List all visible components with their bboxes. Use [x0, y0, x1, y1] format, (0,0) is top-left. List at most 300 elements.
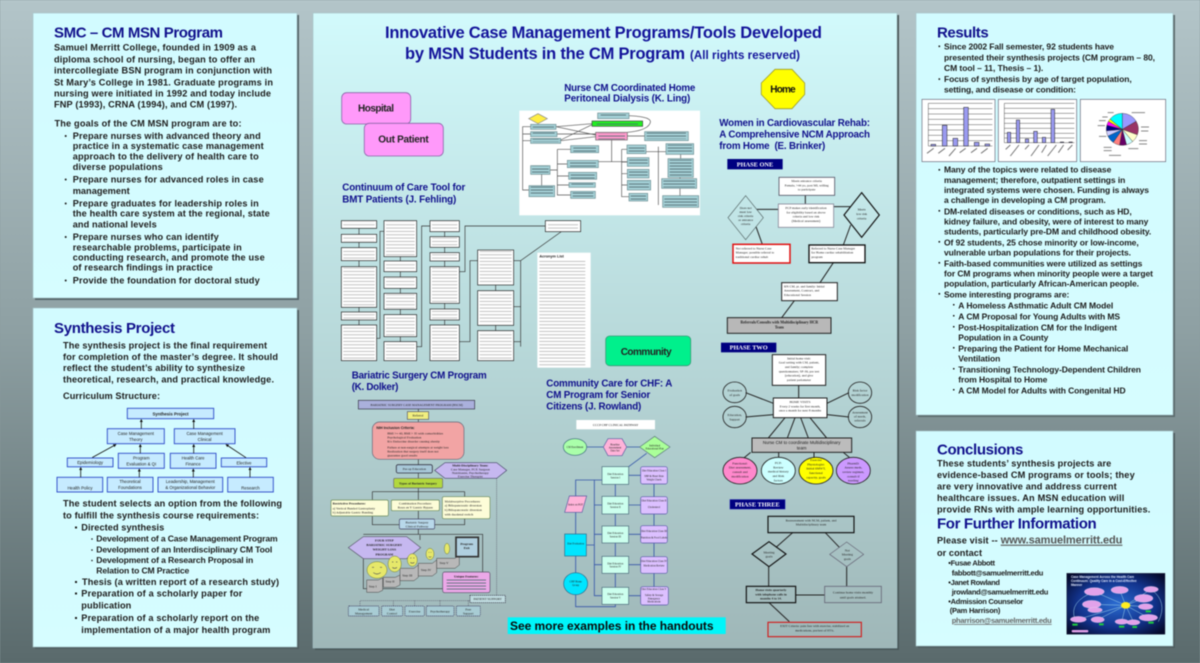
- flowchart: bariatric surgery program: NIH Inclusion Criteria:: [376, 426, 415, 430]
- chart: curriculum structure hierarchy: Elective: [236, 460, 252, 466]
- flowchart: bariatric surgery program: BMI >= 40, BMI > 35 with comorbidities: [387, 431, 444, 436]
- chart: curriculum structure hierarchy: Evaluation & QI: [126, 462, 156, 466]
- flowchart: bariatric surgery program: Multi-Disciplinary Team:: [452, 464, 488, 468]
- flowchart: phase three: EXIT Criteria: pain free with exercise, stabilized on: [780, 624, 850, 629]
- chart: curriculum structure hierarchy: Finance: [185, 462, 201, 466]
- flowchart: phase two: consult and: [732, 470, 748, 474]
- flowchart: CHF clinical pathway: Safety & Storage: [645, 594, 664, 597]
- chart: curriculum structure hierarchy: Program: [133, 456, 150, 461]
- flowchart: phase two: Assessment: [852, 410, 868, 414]
- flowchart: phase three: months 4 to 14.: [760, 597, 782, 601]
- text block: program goals: of research findings in practice: [73, 263, 213, 273]
- flowchart: bariatric surgery program: Step I: [369, 584, 377, 588]
- text block: synthesis options: [63, 499, 282, 635]
- text block: results discussion: Faith-based communities were utilized as settings: [944, 258, 1143, 268]
- flowchart: CHF clinical pathway: Diet Education: [607, 532, 624, 535]
- chart: curriculum structure hierarchy: Leadership, Management: [166, 479, 215, 484]
- text block: results discussion: A CM Model for Adults with Congenital HD: [958, 386, 1126, 396]
- text block: results discussion: A CM Proposal for Young Adults with MS: [958, 311, 1120, 321]
- text block: contact information: •Admission Counselor: [948, 597, 1023, 606]
- flowchart: bariatric surgery program: Exercise: [409, 609, 421, 613]
- chart: curriculum structure hierarchy: [57, 408, 273, 492]
- text block: results discussion: Post-Hospitalization CM for the Indigent: [958, 322, 1117, 332]
- text block: synthesis description: theoretical, research, and practical knowledge.: [63, 375, 274, 385]
- text block: program goals: researchable problems, participate in: [73, 242, 242, 252]
- flowchart: bariatric surgery program: Psychological Evaluation: [387, 435, 422, 439]
- flowchart: phase two: of needs,: [854, 414, 866, 419]
- text block: program goals: conducting research, and promote the use: [73, 253, 265, 263]
- flowchart: bariatric surgery program: BARIATRIC SURGERY: [366, 543, 403, 547]
- flowchart: bariatric surgery program: PATIENT SUPPORT: [473, 597, 502, 601]
- flowchart: phase two: PharmD:: [847, 461, 859, 465]
- text block: contact information: jrowland@samuelmerritt.edu: [951, 588, 1049, 597]
- text block: results summary: presented their synthesis projects (CM program – 80,: [944, 52, 1155, 62]
- flowchart: phase one: [727, 159, 879, 333]
- flowchart: bariatric surgery program: Step III: [402, 574, 412, 578]
- flowchart: bariatric surgery program: Program: [460, 542, 473, 546]
- flowchart: bariatric surgery program: Case Manager, PCP, Surgeon: [451, 467, 490, 472]
- flowchart: CHF clinical pathway: Medications: [647, 601, 661, 604]
- flowchart: bariatric surgery program: BARIATRIC SURGERY CASE MANAGEMENT PROGRAM (BSCM): [370, 403, 463, 407]
- text block: results discussion: students, particularly pre-DM and childhood obesity.: [944, 226, 1151, 236]
- panel: Synthesis Project: [33, 308, 299, 649]
- flowchart: phase two: of goals: [729, 393, 741, 397]
- setting tag: Home: Home: [770, 84, 796, 95]
- heading: For Further Information: For Further Information: [937, 515, 1097, 532]
- text block: synthesis options: to fulfill the synthesis course requirements:: [63, 511, 259, 521]
- flowchart: CHF clinical pathway: Baseline: [610, 444, 620, 447]
- flowchart: bariatric surgery program: Referral: [413, 414, 424, 418]
- flowchart: bariatric surgery program: Failure at non-surgical attempts at weight loss: [387, 446, 449, 450]
- flowchart: CHF clinical pathway: [563, 420, 670, 607]
- flowchart: phase three: medications, pre/test of 95%.: [795, 628, 834, 633]
- flowchart: phase one: Assessment, Contract, and: [784, 289, 820, 294]
- text block: results discussion: [938, 165, 1153, 396]
- flowchart: bariatric surgery program: Control: [387, 611, 397, 615]
- text block: college history: Samuel Merritt College, founded in 1909 as a: [54, 43, 257, 53]
- heading: Bariatric Surgery CM Program: (K. Dolker): [352, 382, 398, 393]
- flowchart: phase two: factors: [774, 478, 784, 482]
- text block: program goals: practice in a systematic case management: [73, 141, 264, 151]
- flowchart: CHF clinical pathway: Session III: [610, 535, 621, 538]
- setting tag: Community: [606, 336, 691, 366]
- chart: curriculum structure hierarchy: Case Management: [118, 431, 155, 436]
- title: (All rights reserved): [690, 50, 800, 62]
- heading: Results: Results: [937, 24, 989, 41]
- flowchart: phase two: modification: [851, 393, 869, 397]
- flowchart: phase one: Educational Session: [784, 293, 811, 297]
- flowchart: bariatric surgery program: Support: [463, 611, 474, 615]
- flowchart: bariatric surgery program: Pre-op Education: [403, 467, 426, 471]
- heading: Bariatric Surgery CM Program: Bariatric Surgery CM Program: [352, 370, 487, 381]
- flowchart: bariatric surgery program: Management: [355, 611, 372, 615]
- text block: synthesis options: Relation to CM Practice: [96, 565, 190, 575]
- text block: results summary: Focus of synthesis by age of target population,: [944, 74, 1132, 84]
- text block: college history: FNP (1993), CRNA (1994), and CM (1997).: [54, 100, 237, 110]
- flowchart: bariatric surgery program: FOUR STEP: [375, 538, 394, 542]
- chart: curriculum structure hierarchy: Theory: [129, 437, 143, 442]
- flowchart: phase three: until goals attained.: [840, 595, 866, 599]
- flowchart: phase two: questionnaires; SF-36, pre test: [779, 369, 819, 374]
- flowchart: bariatric surgery program: a) Biliopancreatic diversion: [445, 504, 482, 508]
- text block: synthesis options: Development of a Case Management Program: [96, 534, 278, 544]
- text block: results discussion: Population in a County: [958, 333, 1049, 343]
- heading: Nurse CM home peritoneal dialysis: Peritoneal Dialysis (K. Ling): [564, 94, 690, 105]
- flowchart: bariatric surgery program: Step IV: [421, 568, 432, 572]
- text block: results discussion: Many of the topics were related to disease: [944, 165, 1112, 175]
- flowchart: phase one: (Medical assessment): [792, 219, 820, 223]
- text block: contact information: Please visit --: [937, 536, 998, 546]
- flowchart: phase three: with telephone calls in: [755, 592, 787, 596]
- text block: synthesis description: for completion of the master’s degree. It should: [63, 352, 278, 362]
- text block: synthesis options: Development of an Interdisciplinary CM Tool: [96, 544, 272, 554]
- image: case management continuum diagram: [1067, 573, 1165, 634]
- flowchart: CHF clinical pathway: Session I: [610, 476, 620, 479]
- setting tag: Out Patient: Out Patient: [378, 135, 429, 146]
- text block: college history: intercollegiate BSN program in conjunction with: [54, 66, 272, 76]
- text block: program goals: Prepare nurses who can identify: [73, 232, 220, 242]
- flowchart: bariatric surgery program: Psychotherapy: [430, 609, 450, 613]
- chart: curriculum structure hierarchy: Theoretical: [119, 479, 141, 484]
- text block: results discussion: Preparing the Patient for Home Mechanical: [958, 344, 1128, 354]
- flowchart: bariatric surgery program: Step V: [439, 561, 449, 565]
- flowchart: CHF clinical pathway: Medication Review: [644, 565, 665, 568]
- flowchart: phase three: Not: [845, 548, 850, 552]
- heading: Community Care for CHF: Community Care for CHF: A: [546, 379, 672, 390]
- text block: contact information: pharrison@samuelmerritt.edu: [952, 616, 1052, 625]
- flowchart: phase one: Female, >44 yo, post MI, willing: [785, 183, 829, 188]
- text block: results discussion: from Hospital to Home: [958, 375, 1048, 385]
- text block: results discussion: a challenge in developing a CM program.: [944, 195, 1106, 205]
- flowchart: bariatric surgery program: Bariatric Surgery: [406, 520, 429, 524]
- flowchart: CHF clinical pathway: CHF Home: [570, 581, 583, 584]
- flowchart: bariatric surgery program: Types of Bariatric Surgery: [399, 481, 437, 485]
- flowchart: phase three: Meeting: [763, 550, 775, 554]
- flowchart: bariatric surgery program: Peer: [465, 607, 472, 611]
- text block: program goals: approach to the delivery of health care to: [73, 152, 259, 162]
- text block: synthesis options: The student selects an option from the following: [63, 499, 282, 509]
- flowchart: phase one: criteria: [741, 222, 751, 226]
- flowchart: CHF clinical pathway: CM Enrollment: [567, 446, 584, 449]
- heading: Synthesis Project: Synthesis Project: [54, 320, 175, 337]
- flowchart: bariatric surgery program: WEIGHT LOSS: [373, 548, 396, 552]
- setting tag: Out Patient: [364, 123, 443, 156]
- text block: contact information: •Janet Rowland: [948, 578, 1000, 587]
- text block: program goals: Prepare nurses with advanced theory and: [73, 131, 261, 141]
- flowchart: bariatric surgery program: a) Vertical Banded Gastroplasty: [333, 506, 375, 510]
- flowchart: bariatric surgery program: guarantee good results: [387, 454, 418, 458]
- text block: results discussion: Transitioning Technology-Dependent Children: [958, 365, 1141, 375]
- flowchart: phase three: Meeting: [842, 553, 853, 557]
- text block: program goals: Prepare graduates for leadership roles in: [73, 199, 259, 209]
- setting tag: Hospital: [342, 93, 411, 124]
- text block: results discussion: Of 92 students, 25 chose minority or low-income,: [944, 237, 1139, 247]
- flowchart: phase two: Initial home visit:: [787, 356, 811, 360]
- text block: results discussion: vulnerable urban populations for their projects.: [944, 247, 1131, 257]
- flowchart: CHF clinical pathway: Session IV: [610, 566, 621, 569]
- flowchart: bariatric surgery program: Malabsorptive Procedures:: [445, 499, 481, 503]
- flowchart: bariatric surgery program: Step II: [386, 580, 394, 584]
- flowchart: phase two: Education,: [728, 413, 742, 418]
- panel: SMC CM MSN program: [33, 13, 299, 300]
- flowchart: phase two: medical history: [768, 470, 789, 474]
- text block: results discussion: integrated systems were chosen. Funding is always: [944, 185, 1149, 195]
- flowchart: peritoneal dialysis: [519, 111, 700, 215]
- text block: program goals: the health care system at the regional, state: [73, 209, 270, 219]
- flowchart: bariatric surgery program: Clinical Pathway: [406, 524, 429, 528]
- flowchart: phase two: Evaluation: [727, 389, 742, 393]
- flowchart: CHF clinical pathway: Session V: [610, 596, 621, 599]
- flowchart: phase one: program: [811, 255, 823, 259]
- flowchart: CHF clinical pathway: SBP & Heart Rate: [644, 475, 665, 478]
- flowchart: phase two: Risk factor: [853, 389, 868, 393]
- flowchart: phase two: and family; complete: [785, 365, 814, 369]
- flowchart: CHF clinical pathway: Group: [572, 584, 580, 587]
- flowchart: phase two: (education), and give: [785, 374, 814, 379]
- acronym list: [537, 253, 591, 368]
- chart: curriculum structure hierarchy: Health Policy: [67, 486, 93, 490]
- flowchart: phase one: Manager; possible referral to: [736, 251, 775, 255]
- flowchart: bariatric surgery program: Realization that surgery itself does not: [387, 450, 439, 454]
- flowchart: phase two: [721, 343, 872, 484]
- text block: results discussion: A Homeless Asthmatic Adult CM Model: [958, 300, 1113, 310]
- chart: curriculum structure hierarchy: Research: [241, 486, 260, 490]
- flowchart: continuum of care tool: [341, 221, 591, 368]
- flowchart: bariatric surgery program: Unique Features:: [454, 575, 479, 579]
- flowchart: phase two: needing: [848, 479, 859, 483]
- flowchart: bariatric surgery program: Medical: [358, 607, 369, 611]
- chart: curriculum structure hierarchy: & Organizational Behavior: [165, 485, 216, 490]
- flowchart: phase one: RN CM, pt. and family: Initial: [784, 284, 825, 289]
- text block: program goals: management: [73, 186, 130, 196]
- text block: synthesis options: Development of a Research Proposal in: [96, 555, 253, 565]
- setting tag: Home: [761, 69, 805, 109]
- flowchart: phase two: Review: [773, 465, 784, 469]
- flowchart: bariatric surgery program: Diet: [389, 607, 395, 611]
- flowchart: phase three: Continue home visits monthly: [833, 591, 873, 595]
- flowchart: CHF clinical pathway: Diet Education Class II: [642, 499, 667, 502]
- text block: synthesis options: publication: [81, 601, 132, 611]
- text block: conclusions: provide RNs with ample learning opportunities.: [937, 504, 1150, 514]
- flowchart: bariatric surgery program: [331, 400, 507, 616]
- text block: program goals: diverse populations: [73, 162, 163, 172]
- title: Innovative Case Management Programs/Tools Developed: [385, 24, 822, 42]
- flowchart: phase two: Initial 6MWT,: [806, 467, 826, 472]
- acronym list: Acronym List: [539, 255, 565, 259]
- flowchart: phase one: traditional cardiac rehab: [736, 255, 768, 259]
- flowchart: CHF clinical pathway: Diet Education Class IV: [641, 560, 667, 563]
- flowchart: CHF clinical pathway: Session II: [610, 506, 621, 509]
- flowchart: bariatric surgery program: b) Adjustable Gastric Banding: [333, 511, 373, 515]
- text block: results summary: CM tool – 11, Thesis – 1).: [944, 63, 1043, 73]
- chart: curriculum structure hierarchy: Clinical: [198, 437, 212, 442]
- flowchart: CHF clinical pathway: Diet Education Class V: [642, 588, 667, 591]
- flowchart: bariatric surgery program: Combination Procedure:: [399, 502, 432, 506]
- text block: synthesis description: reflect the student’s ability to synthesize: [63, 363, 245, 373]
- text block: synthesis options: implementation of a major health program: [81, 625, 270, 635]
- chart: curriculum structure hierarchy: Foundations: [118, 485, 142, 490]
- flowchart: phase one: PCP makes early identification: [785, 206, 827, 210]
- chart: curriculum structure hierarchy: Epidemiology: [77, 460, 104, 465]
- flowchart: CHF clinical pathway: Diet Education Class III: [641, 530, 667, 533]
- heading: Women in Cardiovascular Rehab: [719, 118, 870, 152]
- title: [385, 24, 822, 63]
- flowchart: phase two: team: [797, 446, 807, 451]
- heading: Continuum of Care Tool: Continuum of Care Tool for: [342, 183, 465, 194]
- text block: conclusions: healthcare issues. An MSN education will: [937, 493, 1124, 503]
- text block: college history: [54, 43, 273, 110]
- flowchart: CHF clinical pathway: Assessment: [609, 447, 622, 450]
- flowchart: phase two: patient pedometer: [787, 378, 812, 382]
- heading: SMC CM MSN Program: SMC – CM MSN Program: [54, 24, 223, 41]
- heading: Women in Cardiovascular Rehab: from Home (E. Brinker): [719, 141, 825, 152]
- text block: results discussion: kidney failure, and obesity, were of interest to many: [944, 216, 1149, 226]
- flowchart: phase one: low risk: [856, 212, 867, 216]
- flowchart: CHF clinical pathway: Diet Education: [607, 473, 624, 476]
- flowchart: phase two: Assess meds,: [844, 466, 862, 471]
- flowchart: phase one: meet low: [740, 210, 752, 214]
- flowchart: CHF clinical pathway: Nutrition & Food Labels: [641, 536, 667, 539]
- chart: curriculum structure hierarchy: Case Management: [186, 431, 224, 436]
- flowchart: CHF clinical pathway: Diet Evaluation: [567, 543, 585, 546]
- flowchart: phase one: Referrals/Consults with Multidisciplinary HCR: [740, 321, 818, 325]
- flowchart: phase two: Physiologist:: [807, 462, 825, 466]
- flowchart: phase one: for Home cardiac rehabilitation: [811, 251, 854, 255]
- flowchart: phase one: Team: [775, 326, 785, 330]
- flowchart: phase one: for eligibility based on above: [786, 210, 826, 214]
- flowchart: phase one: Does not: [740, 206, 752, 210]
- flowchart: phase two: Functional:: [732, 461, 748, 465]
- title: by MSN Students in the CM Program: [405, 45, 685, 63]
- heading: Community Care for CHF: [546, 379, 672, 412]
- flowchart: CHF clinical pathway: Individual: [649, 444, 660, 447]
- text block: college history: St Mary’s College in 1981. Graduate programs in: [54, 77, 273, 87]
- flowchart: phase one: Referred to Nurse Case Manager: [811, 246, 856, 250]
- flowchart: phase three: goals: [844, 557, 852, 561]
- flowchart: CHF clinical pathway: Diet Education Class I: [642, 470, 666, 473]
- flowchart: CHF clinical pathway: Cholesterol: [648, 506, 660, 509]
- flowchart: phase one: or entrance: [738, 218, 754, 222]
- chart: focus by setting: [998, 99, 1077, 162]
- chart: focus by age of target population: [922, 99, 995, 162]
- chart: curriculum structure hierarchy: Synthesis Project: [152, 411, 189, 416]
- text block: synthesis options: Directed synthesis: [81, 523, 164, 533]
- panel: Results: [916, 13, 1175, 417]
- flowchart: CHF clinical pathway: CCCP CHF CLINICAL PATHWAY: [593, 423, 639, 427]
- text block: synthesis description: [63, 341, 278, 385]
- flowchart: bariatric surgery program: Exercise Therapist: [458, 474, 483, 478]
- text block: results discussion: DM-related diseases or conditions, such as HD,: [944, 206, 1132, 216]
- flowchart: phase two: Diet assessment,: [729, 466, 751, 471]
- text block: conclusions: evidence-based CM programs or tools; they: [937, 470, 1136, 480]
- text block: contact information: fabbott@samuelmerritt.edu: [952, 568, 1044, 577]
- flowchart: phase two: review regimen,: [843, 470, 864, 475]
- image: case management continuum diagram: Case Management Across the Health Care: [1071, 575, 1134, 579]
- flowchart: phase two: Goal setting with CM, patient,: [779, 361, 819, 366]
- flowchart: phase two: Nurse CM to coordinate Multidisciplinary: [763, 440, 841, 445]
- flowchart: CHF clinical pathway: Diet Education: [607, 593, 624, 596]
- heading: Community Care for CHF: CM Program for Senior: [546, 390, 650, 401]
- flowchart: phase one: criteria: [857, 216, 867, 220]
- flowchart: phase two: functional: [809, 471, 823, 475]
- flowchart: bariatric surgery program: R/o Endocrine disorder causing obesity: [387, 439, 440, 443]
- panel: Conclusions and further information: [916, 431, 1175, 648]
- heading: Nurse CM home peritoneal dialysis: [564, 83, 696, 105]
- flowchart: phase three: Home visits quarterly: [756, 588, 787, 592]
- text block: results summary: Since 2002 Fall semester, 92 students have: [944, 41, 1114, 51]
- image: case management continuum diagram: Continuum: Quality Care in a Cost-Effective: [1071, 579, 1137, 583]
- text block: college history: nursing were initiated in 1992 and today include: [54, 89, 271, 99]
- text block: contact information: (Pam Harrison): [950, 606, 1001, 615]
- flowchart: phase one: Not referred to Nurse Case: [736, 246, 772, 250]
- flowchart: bariatric surgery program: Roux en Y Gastric Bypass: [398, 506, 434, 510]
- text block: program goals: Provide the foundation for doctoral study: [73, 275, 261, 285]
- text block: conclusions: [937, 458, 1150, 514]
- heading: Continuum of Care Tool: [342, 183, 465, 205]
- text block: program goals: The goals of the CM MSN program are to:: [54, 118, 242, 128]
- text block: results discussion: management; therefore, outpatient settings in: [944, 175, 1125, 185]
- setting tag: Community: Community: [621, 347, 672, 358]
- flowchart: phase two: once a month for next 8 months: [779, 409, 822, 413]
- flowchart: phase two: modification: [731, 474, 749, 478]
- flowchart: phase two: PHASE TWO: [730, 345, 768, 352]
- flowchart: bariatric surgery program: with duodenal switch: [445, 512, 473, 516]
- flowchart: bariatric surgery program: b) Biliopancreatic diversion: [445, 508, 482, 512]
- text block: program goals: [54, 118, 270, 285]
- text block: conclusions: are very innovative and address current: [937, 481, 1117, 491]
- flowchart: phase three: PHASE THREE: [735, 502, 780, 509]
- setting tag: Hospital: Hospital: [358, 104, 394, 115]
- flowchart: CHF clinical pathway: Educational Plan: [646, 447, 664, 450]
- flowchart: bariatric surgery program: Exit: [464, 546, 471, 550]
- text block: program goals: and national levels: [73, 219, 157, 229]
- heading: Community Care for CHF: Citizens (J. Rowland): [546, 401, 641, 412]
- flowchart: bariatric surgery program: Restrictive Procedures:: [333, 502, 366, 506]
- flowchart: phase one: criteria and low risk: [793, 215, 820, 219]
- text block: synthesis options: Thesis (a written report of a research study): [82, 577, 279, 587]
- heading: Continuum of Care Tool: BMT Patients (J. Fehling): [342, 194, 456, 205]
- flowchart: CHF clinical pathway: Emergency: [648, 597, 661, 600]
- text block: synthesis description: The synthesis project is the final requirement: [63, 341, 267, 351]
- text block: synthesis options: Preparation of a scholarly report on the: [81, 613, 259, 623]
- flowchart: CHF clinical pathway: Diet Education: [607, 503, 624, 506]
- flowchart: phase three: Multidisciplinary team: [796, 523, 827, 527]
- flowchart: phase two: PCP:: [775, 461, 782, 465]
- flowchart: bariatric surgery program: PROGRAM: [376, 552, 394, 556]
- chart: focus by disease or condition: [1080, 99, 1166, 162]
- flowchart: phase three: goals: [765, 555, 773, 559]
- heading: Women in Cardiovascular Rehab: Women in Cardiovascular Rehab:: [719, 118, 870, 129]
- flowchart: bariatric surgery program: Nutritionist, Psychotherapy: [452, 471, 489, 476]
- text block: results discussion: population, particularly African-American people.: [944, 278, 1139, 288]
- text block: results discussion: Ventilation: [958, 354, 1000, 364]
- text block: results discussion: Some interesting programs are:: [944, 289, 1069, 299]
- flowchart: CHF clinical pathway: Weight Check: [646, 478, 662, 481]
- flowchart: phase two: Every 2 weeks for first month,: [780, 404, 820, 409]
- flowchart: CHF clinical pathway: Index on POT: [568, 503, 584, 506]
- text block: contact information: [937, 535, 1122, 625]
- flowchart: phase two: referrals: [854, 418, 866, 422]
- flowchart: CHF clinical pathway: Data Set: [610, 450, 620, 453]
- flowchart: phase three: Reassessment with NCM, patient, and: [786, 518, 837, 523]
- text block: results discussion: for CM programs when minority people were a target: [944, 268, 1153, 278]
- flowchart: phase two: capacity, goals: [806, 475, 826, 480]
- text block: contact information: or contact: [937, 548, 982, 558]
- flowchart: phase two: and Risk: [772, 474, 785, 478]
- flowchart: phase two: HOME VISITS: [790, 400, 811, 404]
- flowchart: phase one: risk criteria: [738, 214, 754, 218]
- text block: synthesis options: Preparation of a scholarly paper for: [81, 589, 243, 599]
